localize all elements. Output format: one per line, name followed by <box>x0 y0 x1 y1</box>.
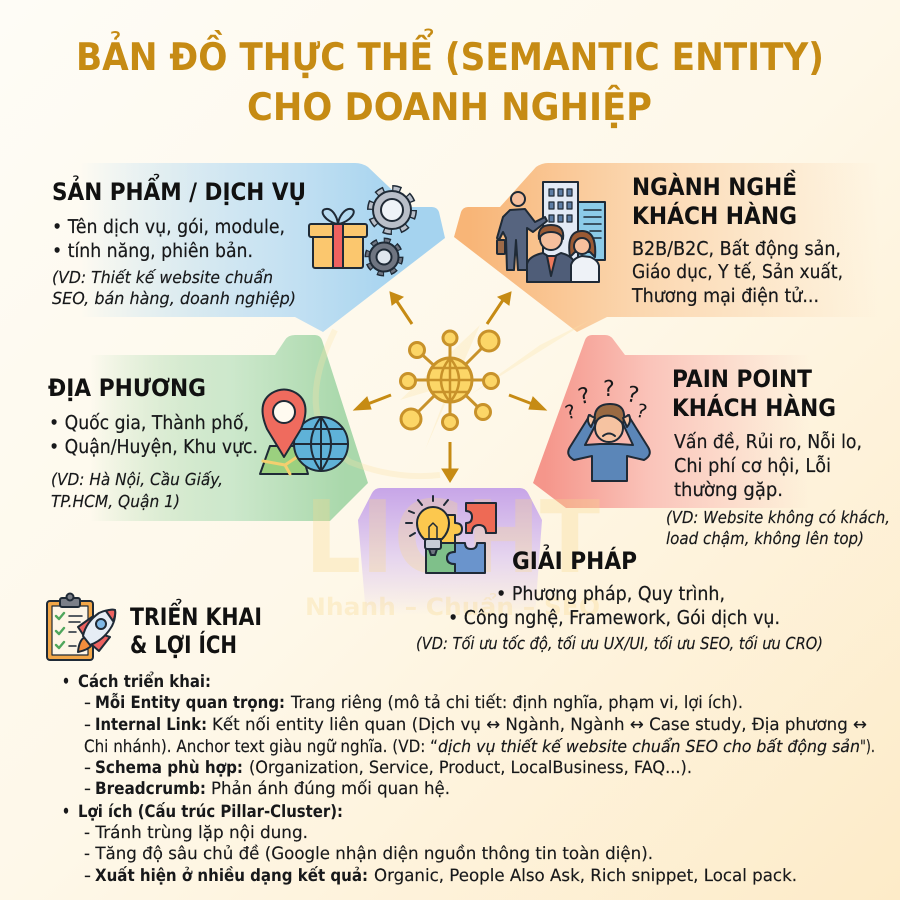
panel text: sản phẩm / dịch vụ: • tính năng, phiên bản. <box>52 240 253 262</box>
panel text: sản phẩm / dịch vụ: • Tên dịch vụ, gói, module, <box>52 216 285 238</box>
panel text: địa phương: • Quận/Huyện, Khu vực. <box>49 436 258 458</box>
title <box>76 28 824 129</box>
panel text: pain point khách hàng: Vấn đề, Rủi ro, Nỗi lo, <box>674 431 862 453</box>
icon: worried person: ? <box>624 382 641 409</box>
panel text: giải pháp: (VD: Tối ưu tốc độ, tối ưu UX/UI, tối ưu SEO, tối ưu CRO) <box>416 634 823 653</box>
watermark logo and brand: LIGHT <box>305 479 600 596</box>
panel text: ngành nghề khách hàng: Thương mại điện tử... <box>631 285 819 307</box>
icon: map pin and globe <box>260 390 348 474</box>
heading: triển khai và lợi ích: & LỢI ÍCH <box>130 630 237 659</box>
panel text: giải pháp: • Công nghệ, Framework, Gói dịch vụ. <box>448 607 780 629</box>
text block: lợi ích: • <box>62 802 70 822</box>
text block: lợi ích: Organic, People Also Ask, Rich snippet, Local pack. <box>374 866 797 886</box>
panel text: địa phương <box>48 374 258 511</box>
panel: địa phương background <box>90 335 368 521</box>
panel: sản phẩm background <box>80 163 445 332</box>
panel text: ngành nghề khách hàng: B2B/B2C, Bất động sản, <box>632 238 841 260</box>
panel text: ngành nghề khách hàng: KHÁCH HÀNG <box>632 201 797 230</box>
panel text: sản phẩm / dịch vụ: SẢN PHẨM / DỊCH VỤ <box>52 173 306 206</box>
text block: cách triển khai: Trang riêng (mô tả chi tiết: định nghĩa, phạm vi, lợi ích). <box>290 693 743 713</box>
panel text: pain point khách hàng <box>666 365 890 548</box>
panel text: pain point khách hàng: thường gặp. <box>674 479 783 501</box>
icon: worried person: ? <box>634 400 649 424</box>
icon: business people and buildings <box>497 182 605 282</box>
title: CHO DOANH NGHIỆP <box>247 84 652 129</box>
watermark logo and brand <box>305 320 600 621</box>
panel: pain point background <box>533 335 820 508</box>
icon: worried person: ? <box>603 377 615 402</box>
icon: clipboard and rocket <box>47 594 115 660</box>
text block: cách triển khai: - <box>84 693 91 713</box>
text block: cách triển khai <box>62 671 875 799</box>
text block: cách triển khai: - <box>84 779 91 799</box>
panel text: pain point khách hàng: load chậm, không lên top) <box>666 529 864 548</box>
text block: cách triển khai: • <box>62 672 70 692</box>
text block: cách triển khai: Schema phù hợp: <box>95 758 243 778</box>
text block: cách triển khai: Internal Link: <box>95 715 207 735</box>
icon: worried person: ? <box>576 383 592 410</box>
panel text: địa phương: (VD: Hà Nội, Cầu Giấy, <box>51 470 223 489</box>
text block: cách triển khai: (Organization, Service, Product, LocalBusiness, FAQ...). <box>249 758 692 778</box>
text block: cách triển khai: - <box>84 715 91 735</box>
icon: central globe network <box>400 331 499 430</box>
panel text: giải pháp: GIẢI PHÁP <box>512 544 637 575</box>
panel text: sản phẩm / dịch vụ: SEO, bán hàng, doanh nghiệp) <box>52 289 296 308</box>
panel: ngành nghề background <box>454 163 890 332</box>
text block: lợi ích: - <box>84 866 91 886</box>
panel text: pain point khách hàng: Chi phí cơ hội, Lỗi <box>674 455 831 477</box>
icon: worried person: ? <box>563 401 578 424</box>
icon: worried person <box>563 377 650 481</box>
text block: cách triển khai: Phản ánh đúng mối quan hệ. <box>211 779 450 799</box>
text block: cách triển khai: Chi nhánh). Anchor text giàu ngữ nghĩa. (VD: “ <box>84 737 438 757</box>
panel: giải pháp background <box>358 488 542 615</box>
text block: lợi ích: - Tránh trùng lặp nội dung. <box>84 823 308 843</box>
arrows from hub to panels <box>354 292 546 482</box>
panel text: pain point khách hàng: KHÁCH HÀNG <box>672 393 836 422</box>
text block: lợi ích <box>62 802 797 886</box>
icon: light bulb and puzzle <box>406 496 496 573</box>
heading: triển khai và lợi ích: TRIỂN KHAI <box>130 598 262 631</box>
text block: cách triển khai: - <box>84 758 91 778</box>
text block: lợi ích: Lợi ích (Cấu trúc Pillar-Cluster): <box>78 802 343 822</box>
panel text: giải pháp: • Phương pháp, Quy trình, <box>496 583 725 605</box>
panel text: ngành nghề khách hàng: Giáo dục, Y tế, Sản xuất, <box>632 261 843 283</box>
panel text: địa phương: ĐỊA PHƯƠNG <box>48 374 206 402</box>
text block: cách triển khai: Breadcrumb: <box>95 779 206 799</box>
heading: triển khai và lợi ích <box>130 598 262 659</box>
text block: cách triển khai: "). <box>860 737 875 757</box>
panel text: sản phẩm / dịch vụ: (VD: Thiết kế website chuẩn <box>52 268 273 287</box>
text block: lợi ích: - Tăng độ sâu chủ đề (Google nhận diện nguồn thông tin toàn diện). <box>84 844 653 864</box>
panel text: sản phẩm / dịch vụ <box>52 173 306 308</box>
panel text: pain point khách hàng: PAIN POINT <box>672 365 813 393</box>
text block: lợi ích: Xuất hiện ở nhiều dạng kết quả: <box>95 866 368 886</box>
panel text: ngành nghề khách hàng: NGÀNH NGHỀ <box>632 169 797 201</box>
panel text: ngành nghề khách hàng <box>631 169 843 307</box>
watermark logo and brand: Nhanh – Chuẩn – SEO <box>305 593 600 621</box>
panel text: địa phương: TP.HCM, Quận 1) <box>51 492 180 511</box>
panel text: giải pháp <box>416 544 823 653</box>
text block: cách triển khai: Mỗi Entity quan trọng: <box>95 692 285 713</box>
title: BẢN ĐỒ THỰC THỂ (SEMANTIC ENTITY) <box>76 28 824 79</box>
panel text: địa phương: • Quốc gia, Thành phố, <box>49 412 249 434</box>
text block: cách triển khai: Kết nối entity liên quan (Dịch vụ ↔ Ngành, Ngành ↔ Case study, Địa phương ↔ <box>212 715 867 735</box>
icon: gift and gears <box>309 189 413 273</box>
text block: cách triển khai: dịch vụ thiết kế website chuẩn SEO cho bất động sản <box>438 737 860 756</box>
text block: cách triển khai: Cách triển khai: <box>78 671 211 692</box>
